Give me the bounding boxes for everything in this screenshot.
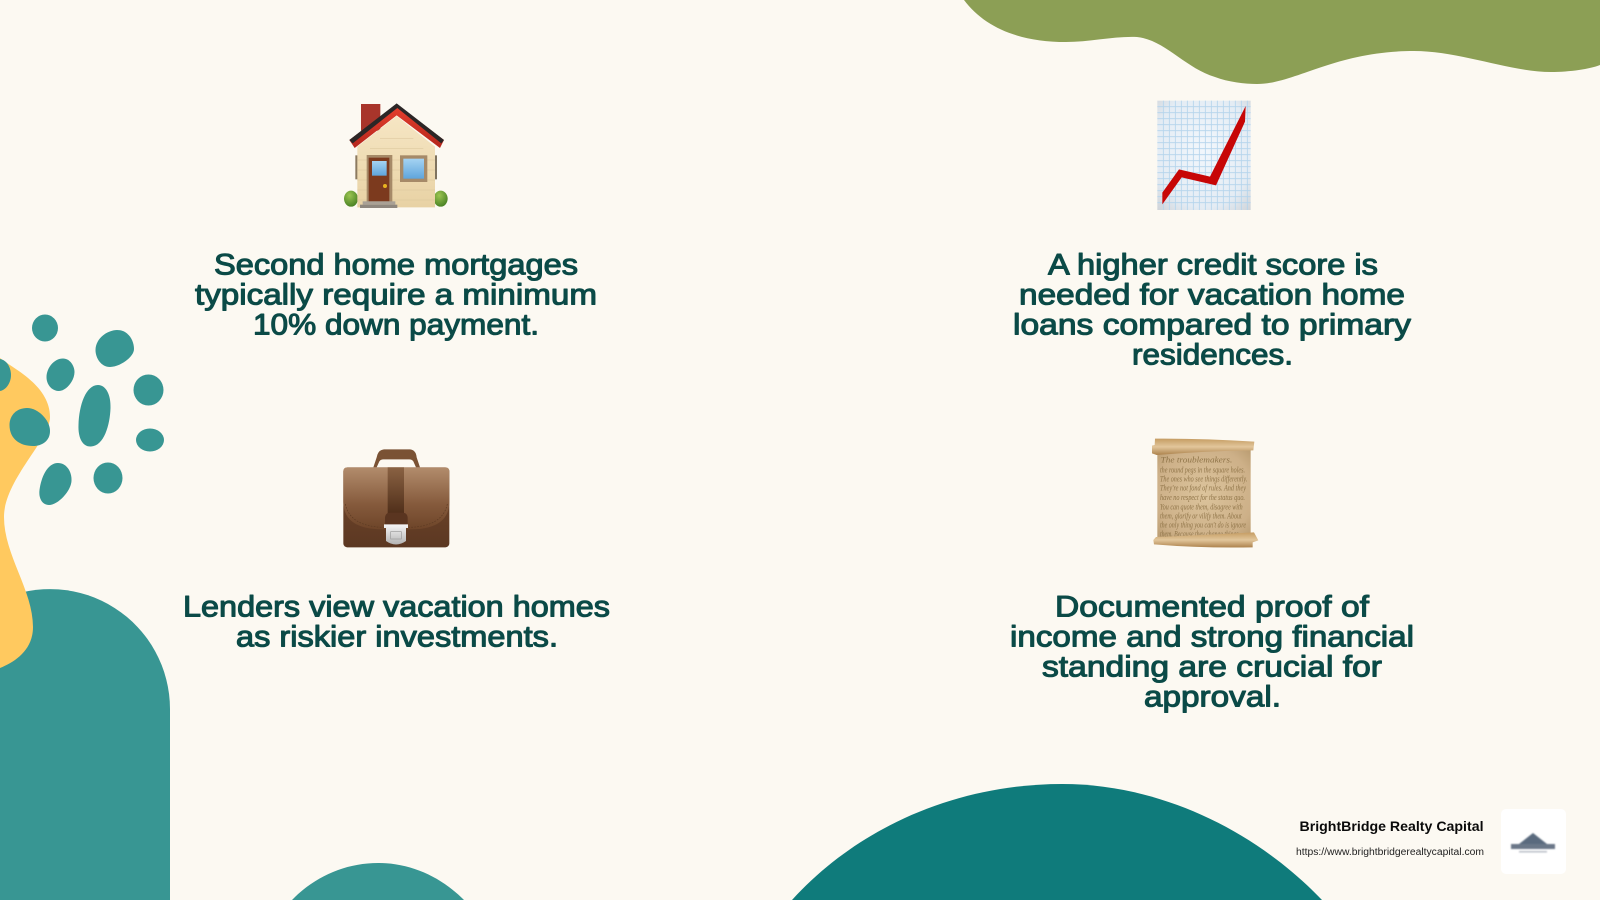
decorative teal dots [0, 314, 164, 505]
text: down payment: typically require a minimum [195, 278, 597, 312]
text: down payment: Second home mortgages [214, 248, 578, 282]
icon: scroll: the round pegs in the square holes. [1160, 464, 1245, 474]
text: proof of income: standing are crucial for [1042, 650, 1382, 684]
text: riskier investments [183, 590, 610, 654]
icon: scroll: The troublemakers. [1161, 455, 1232, 465]
icon: house [344, 103, 448, 208]
text: credit score: residences. [1132, 338, 1293, 372]
icon: briefcase [343, 449, 449, 547]
icon: scroll: them, glorify or vilify them. About [1160, 510, 1242, 520]
text: proof of income [1010, 590, 1414, 714]
text: proof of income: approval. [1144, 680, 1281, 714]
icon: scroll: them. Because they change things. [1160, 529, 1240, 539]
text: credit score [1013, 248, 1411, 372]
panel: minimum down payment [195, 103, 597, 342]
decorative teal dome bottom centre [792, 784, 1322, 900]
icon: scroll: They're not fond of rules. And they [1160, 483, 1246, 493]
icon: scroll: have no respect for the status quo. [1160, 492, 1245, 502]
icon: chart with upward trend [1157, 101, 1251, 210]
text: down payment [195, 248, 597, 342]
text: credit score: A higher credit score is [1048, 248, 1378, 282]
text: credit score: needed for vacation home [1019, 278, 1405, 312]
decorative yellow blob left [0, 358, 50, 668]
text: proof of income: income and strong financial [1010, 620, 1414, 654]
text: riskier investments: as riskier investments. [236, 620, 558, 654]
icon: scroll: You can quote them, disagree with [1160, 501, 1243, 511]
icon: scroll: The ones who see things differently. [1160, 474, 1247, 484]
footer: company name: BrightBridge Realty Capital [1300, 818, 1484, 834]
panel: proof of income [1010, 439, 1414, 714]
decorative small teal dome bottom [292, 863, 464, 900]
panel: riskier investments [183, 449, 610, 654]
decorative teal arch bottom left [0, 589, 170, 900]
panel: higher credit score [1013, 101, 1411, 372]
icon: scroll [1152, 439, 1258, 548]
text: credit score: loans compared to primary [1013, 308, 1411, 342]
decorative green blob top right [964, 0, 1600, 84]
text: proof of income: Documented proof of [1055, 590, 1370, 624]
footer: website url: https://www.brightbridgerealtycapital.com [1296, 847, 1484, 858]
text: down payment: 10% down payment. [253, 308, 539, 342]
icon: scroll: the only thing you can't do is ignore [1160, 520, 1246, 530]
text: riskier investments: Lenders view vacation homes [183, 590, 610, 624]
logo mark [1511, 833, 1555, 852]
logo card [1501, 809, 1566, 874]
